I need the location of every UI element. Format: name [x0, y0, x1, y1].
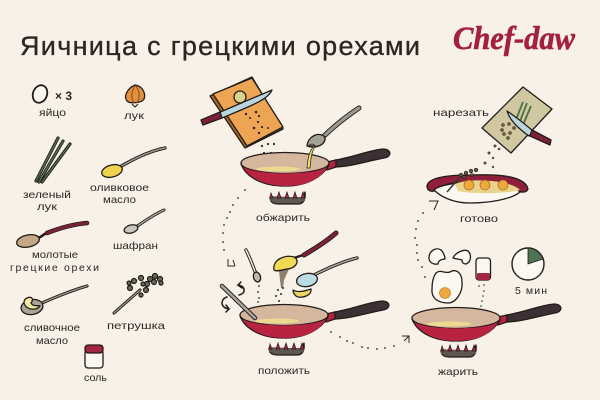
- ingredient: salt: соль: [84, 372, 108, 384]
- ingredient: ground walnuts spoon: грецкие орехи: [10, 262, 99, 274]
- icon: orange cutting board with knife: [201, 77, 283, 148]
- icon: frying pan: [412, 304, 561, 341]
- icon: salt jar: [476, 258, 490, 280]
- ingredient: onion: [124, 85, 145, 122]
- ingredient: salt: [84, 345, 108, 384]
- icon: olive cutting board with knife: [482, 87, 552, 153]
- icon: falling powder: [257, 285, 284, 303]
- icon: walnut spoon with dark red handle: [274, 233, 336, 288]
- icon: plate with omelette: [427, 168, 528, 203]
- ingredient: green onion: лук: [37, 201, 57, 213]
- ingredient: olive oil spoon: [90, 148, 165, 206]
- icon: blue spoon: [296, 258, 357, 288]
- icon: frying pan: [241, 149, 390, 186]
- ingredient: egg: [30, 83, 72, 119]
- ingredient: butter spoon: сливочное: [24, 322, 80, 334]
- ingredient: parsley: петрушка: [107, 320, 165, 332]
- ingredient: onion: лук: [124, 110, 144, 122]
- step 2: add ingredients: [222, 233, 389, 377]
- step 4: chop and serve: [427, 87, 552, 225]
- icon: oil stream: [307, 144, 316, 168]
- ingredient: ground walnuts spoon: молотые: [32, 249, 78, 261]
- ingredient: egg: яйцо: [39, 107, 66, 119]
- ingredient: saffron spoon: шафран: [113, 240, 158, 252]
- icon: small spoon: [246, 250, 262, 283]
- ingredient: olive oil spoon: масло: [103, 194, 136, 206]
- label: жарить: [438, 366, 479, 378]
- icon: falling salt: [478, 284, 485, 307]
- dotted arrow: step 3 to finish: [414, 201, 438, 278]
- icon: frying pan: [240, 301, 389, 338]
- panel: ingredients: [10, 83, 165, 384]
- label: готово: [460, 213, 498, 225]
- icon: nuts falling: [261, 143, 275, 161]
- ingredient: saffron spoon: [113, 210, 164, 252]
- logo: Chef-daw: Chef-daw: [453, 21, 576, 57]
- label: нарезать: [433, 107, 490, 119]
- icon: butter piece: [293, 289, 311, 297]
- ingredient: parsley: [107, 274, 165, 332]
- icon: burner: [441, 345, 476, 357]
- icon: oil spoon pouring: [307, 108, 359, 147]
- icon: fried egg: [432, 271, 462, 303]
- label: обжарить: [256, 212, 311, 224]
- icon: eggshell right: [453, 250, 470, 264]
- step 3: fry egg: [412, 248, 561, 378]
- label: time: 5 мин: [515, 285, 547, 297]
- ingredient: olive oil spoon: оливковое: [90, 182, 149, 194]
- step 1: fry: [201, 77, 390, 224]
- ingredient: butter spoon: [20, 286, 87, 347]
- dotted arrow: step 2 to step 3: [330, 331, 409, 350]
- title: Яичница с грецкими орехами: [20, 31, 420, 61]
- ingredient: green onion: зеленый: [23, 189, 71, 201]
- ingredient: ground walnuts spoon: [10, 223, 99, 274]
- dotted arrow: step 1 to step 2: [222, 189, 246, 266]
- label: положить: [258, 365, 311, 377]
- icon: spatula: [222, 286, 255, 318]
- icon: eggshell left: [429, 249, 445, 264]
- ingredient: egg: ×3: [55, 89, 72, 103]
- icon: burner: [269, 343, 304, 355]
- icon: stirring arrows: [222, 282, 244, 312]
- icon: clock 5 minutes: [512, 248, 544, 280]
- ingredient: butter spoon: масло: [36, 335, 68, 347]
- icon: falling nuts: [484, 144, 500, 168]
- ingredient: green onion: [23, 138, 71, 213]
- icon: burner: [270, 192, 305, 204]
